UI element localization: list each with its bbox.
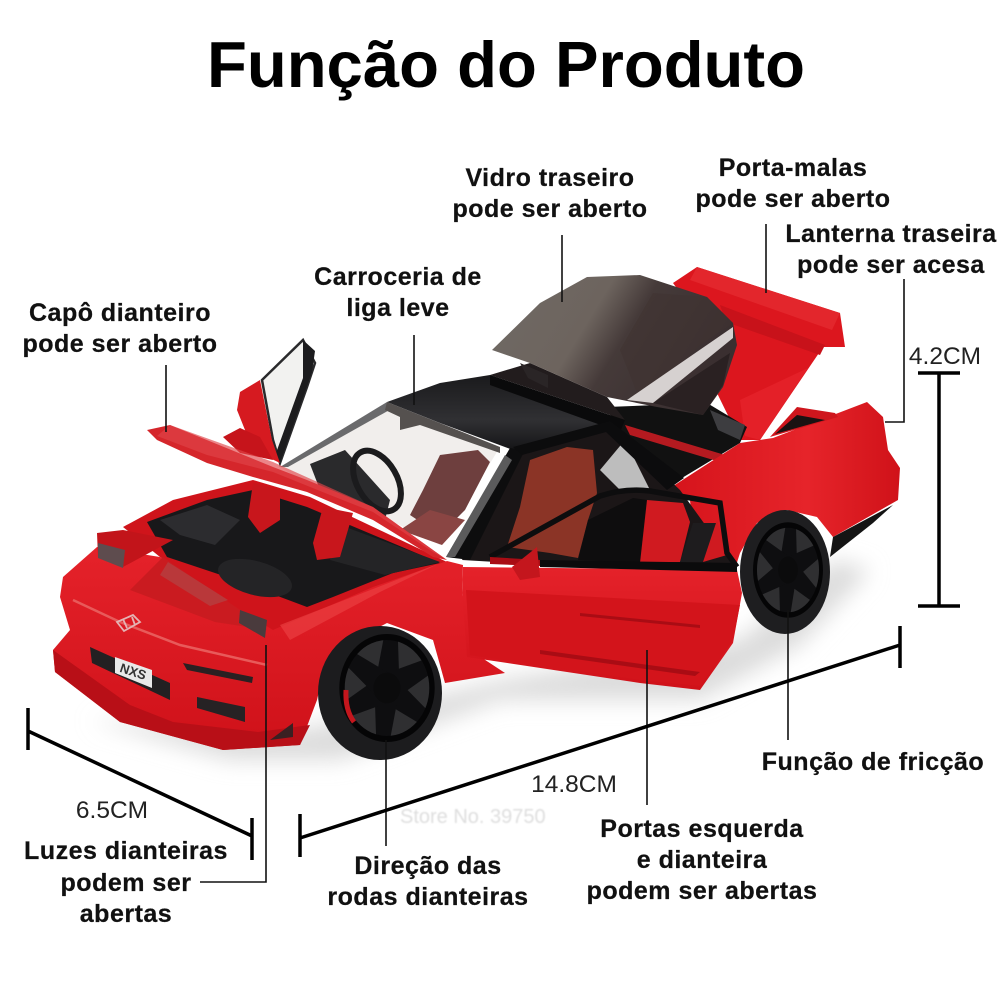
label: headlights: Luzes dianteiras — [24, 837, 228, 865]
hatch hinge rail — [490, 363, 625, 420]
A pillar — [446, 448, 525, 560]
fender highlight — [280, 563, 440, 640]
roof — [387, 375, 620, 450]
watermark: Store No. 39750 — [400, 806, 546, 828]
label: tail light: pode ser acesa — [797, 251, 985, 279]
trunk lid — [673, 267, 845, 440]
label: doors: Portas esquerda — [600, 815, 804, 843]
dimension: length 14.8CM — [300, 626, 900, 857]
headlight strip — [183, 663, 253, 683]
label: rear glass: Vidro traseiro — [465, 164, 635, 192]
label: doors: e dianteira — [637, 846, 768, 874]
title: Função do Produto — [207, 28, 805, 101]
grille — [90, 647, 170, 700]
windshield — [280, 410, 500, 545]
open hood — [147, 425, 447, 560]
side mirror — [223, 428, 273, 460]
label: tail light: Lanterna traseira — [785, 220, 997, 248]
ground shadow — [90, 560, 870, 760]
leader lines — [166, 224, 904, 882]
label: alloy body: Carroceria de — [314, 263, 482, 291]
cabin interior — [462, 427, 737, 568]
open door — [462, 547, 742, 690]
dimension: height 4.2CM — [909, 343, 981, 606]
hood center panel — [130, 557, 267, 630]
label: rear glass: pode ser aberto — [452, 195, 648, 223]
hood struts — [248, 483, 280, 533]
number plate: NXS — [118, 660, 148, 683]
popup lamp right — [239, 610, 267, 638]
door glass — [262, 340, 315, 463]
dimension: width 6.5CM — [28, 708, 252, 860]
label: trunk: pode ser aberto — [695, 185, 891, 213]
label: hood: Capô dianteiro — [29, 299, 211, 327]
engine bay — [147, 490, 440, 607]
front body — [53, 547, 505, 750]
door window frame — [490, 490, 737, 567]
splitter — [53, 650, 310, 750]
rear wheel — [740, 510, 830, 634]
logo — [117, 615, 140, 631]
rear lower trim — [830, 505, 893, 557]
open door panel behind glass — [237, 380, 280, 463]
dimension: width 6.5CM: 6.5CM — [76, 797, 148, 824]
label: hood: pode ser aberto — [22, 330, 218, 358]
label: alloy body: liga leve — [346, 294, 450, 322]
red engine bay rim — [123, 480, 447, 632]
label: headlights: abertas — [80, 900, 172, 928]
bumper crease — [73, 600, 267, 665]
seat — [507, 447, 597, 558]
number plate — [115, 657, 152, 688]
dimension: length 14.8CM: 14.8CM — [531, 771, 617, 798]
side vent — [270, 723, 293, 740]
popup lamp left — [97, 530, 173, 567]
label: doors: podem ser abertas — [587, 877, 817, 905]
dimension: height 4.2CM: 4.2CM — [909, 343, 981, 370]
label: trunk: Porta-malas — [719, 154, 867, 182]
roof frame and B pillar — [513, 421, 684, 490]
engine cover bay — [607, 403, 747, 487]
label: headlights: podem ser — [61, 869, 191, 897]
glass hatch — [492, 275, 737, 415]
lower vent — [197, 697, 245, 722]
front wheel — [318, 626, 442, 760]
door window reflections — [578, 498, 647, 563]
car illustration — [53, 267, 900, 760]
label: front wheel steering: Direção das — [354, 852, 502, 880]
label: front wheel steering: rodas dianteiras — [327, 883, 529, 911]
rear body — [667, 402, 900, 610]
roof hinge rail — [490, 375, 625, 432]
label: friction: Função de fricção — [762, 748, 984, 776]
